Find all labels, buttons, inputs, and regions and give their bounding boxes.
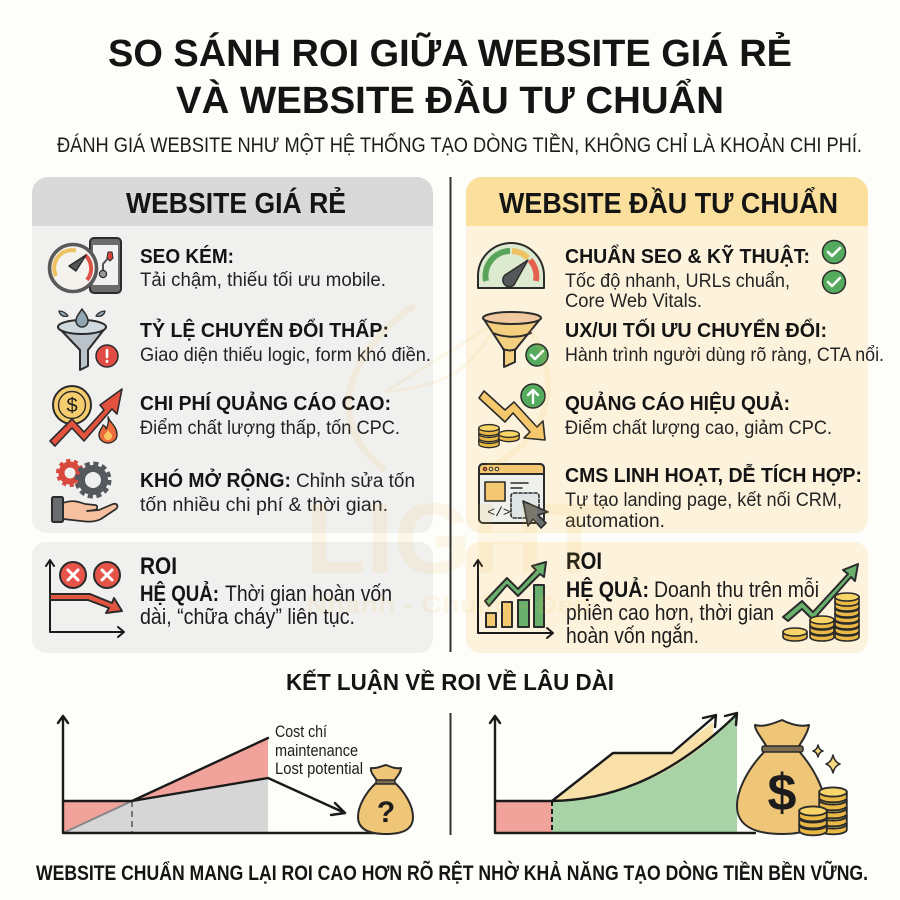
icon: coins with rising arrow [783, 564, 859, 641]
icon: rising ad cost [50, 386, 122, 446]
panel: website đầu tư chuẩn [466, 177, 884, 533]
icon: dollar money bag [737, 720, 840, 834]
item: khó mở rộng [140, 468, 415, 516]
item: quảng cáo hiệu quả: Điểm chất lượng cao, giảm CPC. [565, 418, 832, 439]
icon: question money bag [358, 765, 413, 834]
item: khó mở rộng: KHÓ MỞ RỘNG: [140, 468, 291, 492]
item: ux ui [565, 318, 884, 366]
panel: roi website giá rẻ [32, 542, 433, 653]
icon: cms browser [479, 464, 548, 528]
item: cms linh hoạt: Tự tạo landing page, kết nối CRM, [565, 490, 842, 511]
text: roi hệ quả: dài, “chữa cháy” liên tục. [140, 604, 355, 629]
item: cms linh hoạt: automation. [565, 511, 665, 532]
text: roi hệ quả: ROI [140, 553, 177, 580]
icon: falling ad cost [479, 384, 545, 448]
item: chuẩn seo: Core Web Vitals. [565, 291, 702, 312]
item: tỷ lệ chuyển đổi: Giao diện thiếu logic, form khó điền. [140, 345, 431, 366]
item: chuẩn seo: CHUẨN SEO & KỸ THUẬT: [565, 244, 810, 268]
item: seo kém: Tải chậm, thiếu tối ưu mobile. [140, 270, 386, 291]
item: chi phí quảng cáo: CHI PHÍ QUẢNG CÁO CAO: [140, 392, 391, 415]
title [108, 31, 792, 122]
item: tỷ lệ chuyển đổi [140, 318, 431, 366]
text: roi hệ quả: HỆ QUẢ: [140, 581, 219, 606]
chart: cheap website long term roi [58, 716, 413, 834]
divider [450, 177, 452, 652]
heading: website đầu tư chuẩn: WEBSITE ĐẦU TƯ CHUẨN [499, 186, 838, 220]
item: tỷ lệ chuyển đổi: TỶ LỆ CHUYỂN ĐỔI THẤP: [140, 318, 389, 342]
watermark: logo [305, 305, 605, 619]
icon: leaking funnel [58, 309, 118, 370]
item: quảng cáo hiệu quả: QUẢNG CÁO HIỆU QUẢ: [565, 391, 790, 415]
title: VÀ WEBSITE ĐẦU TƯ CHUẨN [176, 77, 724, 122]
text: roi hệ quả: HỆ QUẢ: [566, 577, 649, 602]
text: roi hệ quả [566, 548, 819, 648]
item: seo kém: SEO KÉM: [140, 245, 234, 268]
icon: declining roi chart [46, 560, 124, 637]
item: ux ui: UX/UI TỐI ƯU CHUYỂN ĐỔI: [565, 318, 827, 342]
text: roi hệ quả: Thời gian hoàn vốn [225, 581, 392, 606]
text: roi hệ quả: phiên cao hơn, thời gian [566, 600, 774, 625]
item: ux ui: Hành trình người dùng rõ ràng, CTA nổi. [565, 345, 884, 366]
item: chi phí quảng cáo: Điểm chất lượng thấp, tốn CPC. [140, 418, 400, 439]
panel: website giá rẻ [32, 177, 433, 533]
chart: standard website long term roi [490, 713, 847, 835]
chart annotation: Cost chí [275, 722, 327, 741]
icon: good gauge [478, 243, 544, 288]
icon: coin stacks [799, 787, 847, 835]
item: khó mở rộng: Chỉnh sửa tốn [296, 471, 415, 492]
icon: funnel with check [483, 312, 548, 367]
heading: website giá rẻ: WEBSITE GIÁ RẺ [126, 186, 346, 220]
item: seo kém [140, 245, 386, 291]
icon: check badges [822, 240, 846, 294]
chart annotation: maintenance [275, 741, 358, 760]
item: cms linh hoạt [565, 464, 862, 532]
icon: speed gauge and phone [49, 238, 121, 293]
item: quảng cáo hiệu quả [565, 391, 832, 439]
item: chuẩn seo: Tốc độ nhanh, URLs chuẩn, [565, 271, 790, 292]
item: cms linh hoạt: CMS LINH HOẠT, DỄ TÍCH HỢP: [565, 464, 862, 487]
watermark: logo: LIGHT [305, 483, 605, 595]
icon: rising ad cost: $ [66, 395, 78, 417]
watermark: logo: Nhanh - Chuẩn - Đẹp [306, 592, 591, 619]
text: roi hệ quả: hoàn vốn ngắn. [566, 623, 699, 648]
text: roi hệ quả [140, 553, 392, 629]
panel: roi website đầu tư chuẩn [466, 542, 868, 653]
title: SO SÁNH ROI GIỮA WEBSITE GIÁ RẺ [108, 31, 792, 75]
divider [450, 713, 452, 835]
chart annotation [275, 722, 363, 778]
item: khó mở rộng: tốn nhiều chi phí & thời gian. [140, 495, 388, 516]
icon: question money bag: ? [377, 796, 395, 829]
item: chuẩn seo [565, 244, 810, 312]
item: chi phí quảng cáo [140, 392, 400, 439]
icon: dollar money bag: $ [768, 764, 797, 822]
icon: gears and hand [52, 461, 117, 522]
icon: growing roi chart [474, 560, 553, 638]
text: roi hệ quả: ROI [566, 548, 602, 575]
text: roi hệ quả: Doanh thu trên mỗi [654, 577, 819, 602]
heading: conclusion: KẾT LUẬN VỀ ROI VỀ LÂU DÀI [286, 668, 614, 695]
icon: cms browser: </> [487, 505, 511, 520]
chart annotation: Lost potential [275, 759, 363, 778]
